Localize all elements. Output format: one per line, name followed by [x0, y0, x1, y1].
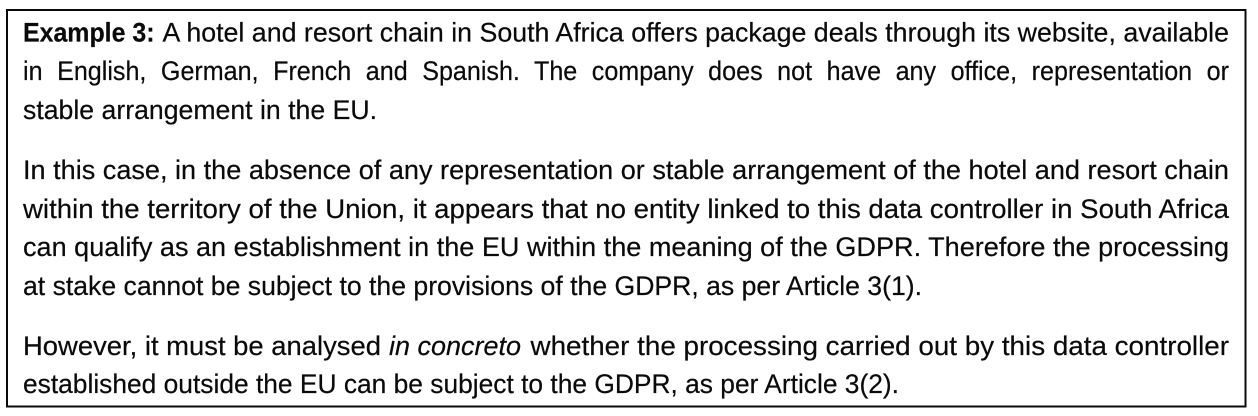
text block: scenario paragraph [23, 18, 1229, 125]
text block: conclusion paragraph [23, 331, 1229, 399]
heading: Example 3: Example 3: [23, 18, 154, 48]
text block: analysis paragraph: within the territory of the Union, it appears that no entity linked to this data controller in South Africa [22, 194, 1229, 224]
text block: analysis paragraph [22, 155, 1229, 301]
text block: analysis paragraph: can qualify as an establishment in the EU within the meaning of the GDPR. Therefore the processing [23, 232, 1229, 262]
text block: analysis paragraph: at stake cannot be subject to the provisions of the GDPR, as per Article 3(1). [23, 271, 922, 301]
text block: conclusion paragraph: established outside the EU can be subject to the GDPR, as per Article 3(2). [23, 369, 899, 399]
text block: conclusion paragraph: in concreto [389, 331, 521, 361]
text block: analysis paragraph: In this case, in the absence of any representation or stable arrangement of the hotel and resort chain [23, 155, 1229, 185]
text block: conclusion paragraph: whether the processing carried out by this data controller [529, 331, 1229, 361]
text block: conclusion paragraph: However, it must be analysed [23, 331, 381, 361]
text block: scenario paragraph: A hotel and resort chain in South Africa offers package deals through its website, available [162, 18, 1229, 48]
text block: scenario paragraph: stable arrangement in the EU. [23, 95, 377, 125]
